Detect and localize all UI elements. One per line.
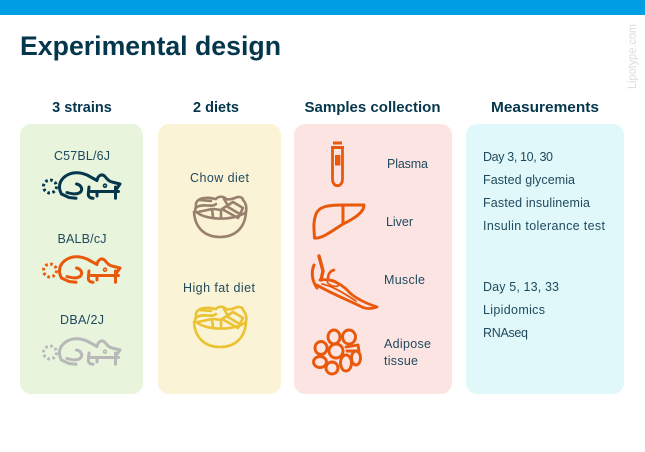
title: Experimental design <box>20 31 281 61</box>
text block: second timepoints <box>483 280 559 340</box>
icon: grey mouse <box>44 339 120 364</box>
text block: first timepoints: Fasted glycemia <box>483 173 575 187</box>
panel: diets <box>158 124 281 394</box>
icon: adipose cells <box>314 330 360 374</box>
label: BALB/cJ: BALB/cJ <box>58 232 106 246</box>
label: liver: Liver <box>386 215 413 229</box>
label: DBA/2J: DBA/2J <box>60 313 104 327</box>
heading: 3 strains: 3 strains <box>52 100 112 116</box>
text block: first timepoints <box>483 150 606 233</box>
watermark: Lipotype.com <box>627 24 639 89</box>
label: chow diet: Chow diet <box>190 171 250 185</box>
icon: yellow bowl <box>194 307 246 347</box>
label: muscle: Muscle <box>384 273 425 287</box>
top banner <box>0 0 645 15</box>
label: adipose tissue: Adipose <box>384 337 431 351</box>
text block: second timepoints: RNAseq <box>483 326 528 340</box>
text block: first timepoints: Day 3, 10, 30 <box>483 150 553 164</box>
panel: measurements <box>466 124 624 394</box>
icon: muscle <box>312 256 377 308</box>
panel: samples <box>294 124 452 394</box>
icon: brown bowl <box>194 197 246 237</box>
label: adipose tissue: tissue <box>384 354 418 368</box>
label: plasma: Plasma <box>387 157 428 171</box>
label: C57BL/6J: C57BL/6J <box>54 149 110 163</box>
text block: second timepoints: Day 5, 13, 33 <box>483 280 559 294</box>
icon: liver <box>314 205 364 238</box>
heading: measurements: Measurements <box>491 100 599 116</box>
panel: strains <box>20 124 143 394</box>
label: adipose tissue <box>384 337 431 368</box>
heading: samples collection: Samples collection <box>304 100 440 116</box>
icon: dark mouse <box>44 173 120 198</box>
text block: first timepoints: Insulin tolerance test <box>483 219 606 233</box>
icon: plasma tube <box>331 143 344 186</box>
text block: first timepoints: Fasted insulinemia <box>483 196 590 210</box>
text block: second timepoints: Lipidomics <box>483 303 545 317</box>
label: high fat diet: High fat diet <box>183 281 256 295</box>
icon: orange mouse <box>44 257 120 282</box>
heading: 2 diets: 2 diets <box>193 100 239 116</box>
